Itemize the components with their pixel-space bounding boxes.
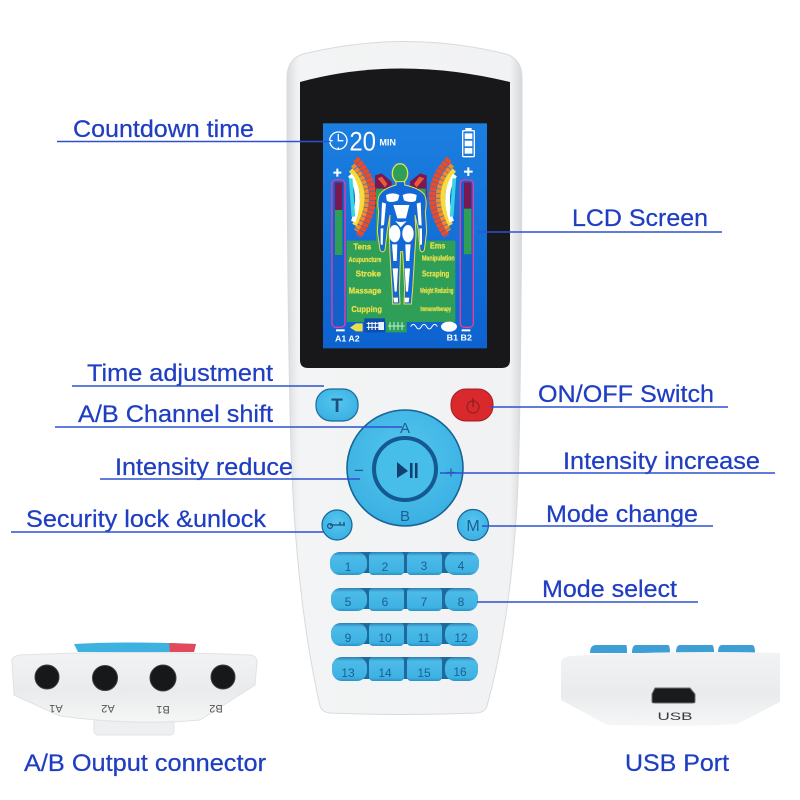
play pause glyph <box>397 462 418 478</box>
key row 1: 1 <box>345 560 352 574</box>
channel labels A: A1 A2 <box>335 334 360 344</box>
countdown value: 20 <box>349 127 376 157</box>
left level fan <box>350 159 373 236</box>
button: mode M <box>458 510 488 540</box>
LCD mode names right: Manipulation <box>422 253 455 262</box>
battery icon <box>463 128 474 157</box>
side view: USB port <box>561 645 780 726</box>
label: A/B channel shift: A/B Channel shift <box>78 401 273 428</box>
key row 1: 2 <box>382 560 389 574</box>
remote casing <box>287 42 522 714</box>
key row 3: 10 <box>378 631 392 645</box>
jack labels <box>49 702 223 715</box>
key row 3 <box>331 623 478 646</box>
countdown unit: MIN <box>379 138 396 148</box>
label: LCD screen: LCD Screen <box>572 205 708 232</box>
LCD green panel <box>347 189 455 322</box>
channel labels B: B1 B2 <box>447 333 472 343</box>
caption: output connector: A/B Output connector <box>24 750 266 777</box>
key row 4: 16 <box>453 665 467 679</box>
key row 2: 8 <box>458 595 465 609</box>
jack labels: B2 <box>209 702 223 714</box>
key row 2 <box>331 588 478 611</box>
top keys <box>590 645 755 653</box>
button: mode M: M <box>466 518 480 535</box>
right level fan <box>432 159 455 236</box>
button: navigation dial: − <box>354 461 364 480</box>
LCD dark wings <box>375 173 427 207</box>
top button strip <box>74 642 196 652</box>
LCD screen <box>323 123 487 348</box>
button: time adjust T: T <box>331 396 343 417</box>
jack labels: A1 <box>49 702 63 714</box>
LCD mode names right <box>420 241 455 313</box>
button: navigation dial: B <box>400 508 410 525</box>
side view: output connectors <box>12 642 257 735</box>
button: navigation dial: + <box>446 463 456 482</box>
LCD mode names left: Cupping <box>351 304 382 314</box>
key row 3: 12 <box>454 631 468 645</box>
label: time adjustment: Time adjustment <box>87 360 273 387</box>
key row 3: 9 <box>345 631 352 645</box>
LCD waveform strip <box>350 318 457 332</box>
LCD mode names left <box>349 242 382 314</box>
LCD mode names right: Immunotherapy <box>420 306 451 313</box>
key row 2: 6 <box>382 595 389 609</box>
label: on/off switch: ON/OFF Switch <box>538 381 714 408</box>
USB text: USB <box>658 711 692 723</box>
plug stub <box>94 715 174 735</box>
key row 3: 11 <box>418 631 431 645</box>
keypad 1-16 <box>330 552 479 681</box>
jacks <box>35 665 235 691</box>
LCD mode names right: Ems <box>430 241 446 251</box>
label: security lock and unlock: Security lock &unlock <box>26 506 267 533</box>
key row 2: 5 <box>345 595 352 609</box>
connector casing <box>12 652 257 722</box>
LCD mode names left: Tens <box>353 242 372 252</box>
button: navigation dial <box>347 410 463 526</box>
button: time adjust T <box>316 389 358 421</box>
key row 4: 13 <box>341 666 355 680</box>
label: mode change: Mode change <box>546 501 698 528</box>
key row 2: 7 <box>421 595 428 609</box>
USB socket <box>652 688 695 703</box>
key row 4: 14 <box>378 666 392 680</box>
key row 1: 4 <box>458 559 465 573</box>
LCD mode names left: Massage <box>349 286 382 296</box>
label: countdown time: Countdown time <box>73 116 254 143</box>
label: mode select: Mode select <box>542 576 677 603</box>
caption: USB port: USB Port <box>625 750 729 777</box>
jack labels: B1 <box>156 703 170 715</box>
key row 4: 15 <box>417 666 431 680</box>
key row 4 <box>332 657 478 681</box>
label: intensity reduce: Intensity reduce <box>115 454 293 481</box>
jack labels: A2 <box>101 702 115 714</box>
key row 1 <box>330 552 479 575</box>
LCD mode names right: Weight Reducing <box>420 286 453 295</box>
figure muscles <box>381 193 422 302</box>
button: navigation dial: A <box>400 420 410 437</box>
right intensity bar <box>460 167 473 331</box>
USB casing <box>561 652 780 726</box>
black screen bezel <box>300 68 510 368</box>
device: remote control body <box>287 42 522 714</box>
LCD mode names left: Acupuncture <box>349 255 381 264</box>
left intensity bar <box>332 169 345 331</box>
LCD arrows <box>378 177 424 187</box>
LCD mode names left: Stroke <box>356 268 381 278</box>
key row 1: 3 <box>421 559 428 573</box>
body figure <box>377 164 427 304</box>
button: power <box>451 389 493 421</box>
label: intensity increase: Intensity increase <box>563 448 760 475</box>
countdown clock icon <box>330 132 347 149</box>
LCD mode names right: Scraping <box>422 268 449 278</box>
button: security lock <box>322 510 352 540</box>
